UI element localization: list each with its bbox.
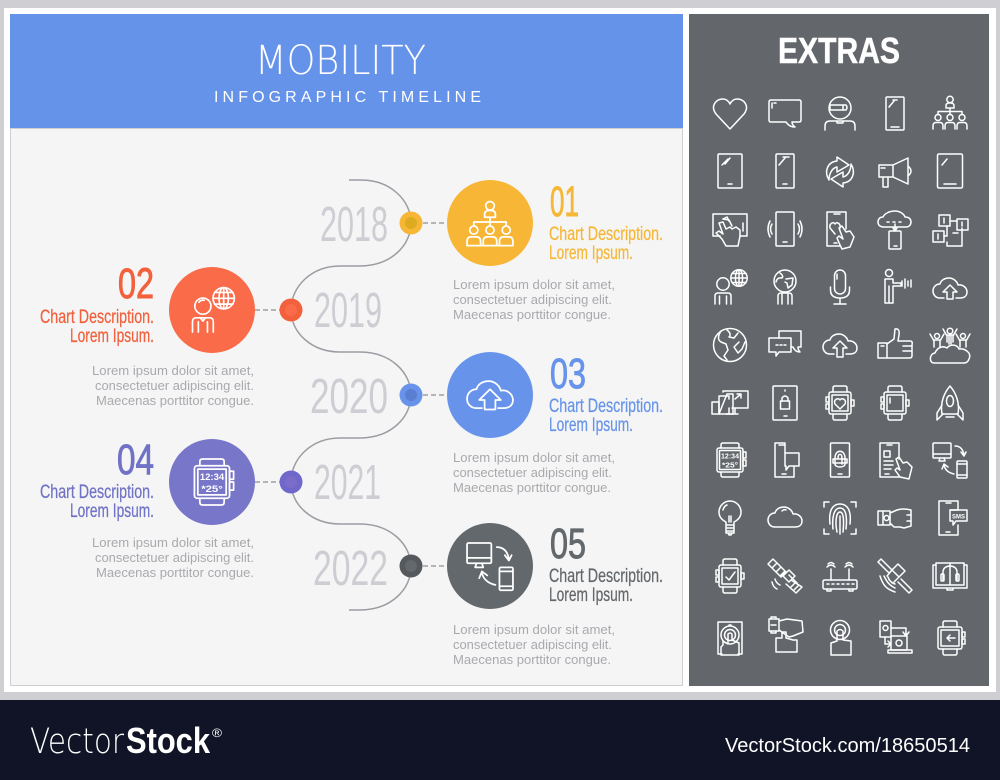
dot: 2019 (280, 298, 302, 322)
icon: light bulb (719, 501, 741, 535)
body text: Lorem ipsum dolor sit amet, (92, 363, 254, 378)
icon: smart watch: *25° (201, 484, 223, 495)
body text (453, 450, 615, 495)
body text (92, 535, 254, 580)
icon: megaphone (879, 158, 911, 187)
icon: watch (881, 386, 909, 420)
icon: phone with notifications (933, 215, 968, 246)
icon: cloud upload (933, 278, 967, 299)
body text: Lorem ipsum dolor sit amet, (453, 622, 615, 637)
chart description (549, 224, 663, 264)
chart description: Lorem Ipsum. (70, 501, 154, 522)
icon: hierarchy (933, 96, 967, 129)
number 01: 01 (550, 178, 579, 226)
icon: phone (776, 154, 794, 188)
connector dashes (255, 223, 447, 566)
subtitle: INFOGRAPHIC TIMELINE (214, 89, 481, 106)
chart description (549, 396, 663, 436)
icon: microphone (830, 270, 850, 304)
image id: VectorStock.com/18650514 (725, 735, 970, 757)
footer: VectorStock bar (30, 720, 970, 762)
year: 2019: 2019 (314, 284, 382, 338)
chart description: Chart Description. (549, 566, 663, 587)
icon: watch with time (717, 443, 746, 477)
icon: tablet large (938, 154, 962, 188)
icon: smart watch (194, 459, 234, 505)
body text: Maecenas porttitor congue. (96, 393, 254, 408)
body text: Maecenas porttitor congue. (453, 480, 611, 495)
step 02 (40, 260, 255, 408)
icon: rocket (937, 386, 963, 420)
icon: person with headset (825, 97, 855, 130)
icon: phone with fingerprint (830, 443, 850, 477)
icon: hierarchy (467, 201, 513, 246)
extras heading: EXTRAS (778, 30, 900, 71)
icon: globe on person (774, 270, 796, 304)
body text: Maecenas porttitor congue. (453, 652, 611, 667)
body text: consectetuer adipiscing elit. (95, 378, 254, 393)
icon: tablet touch (718, 622, 742, 655)
dot: 2020 (400, 384, 422, 406)
panel: timeline (10, 14, 683, 686)
dot: 2021 (280, 470, 302, 494)
icon: person and globe (192, 288, 234, 332)
icon: watch with time: 12:34 (721, 454, 739, 460)
body text: consectetuer adipiscing elit. (453, 465, 612, 480)
step 04 (40, 436, 255, 580)
icon: hand on tablet (713, 214, 747, 246)
icon: wrist watch (878, 509, 911, 528)
panel: extras (689, 14, 989, 686)
icon: cloud (768, 507, 802, 527)
dot: 2018 (400, 212, 422, 234)
number 04: 04 (117, 436, 154, 484)
icon: speech bubble (769, 100, 801, 127)
icon: cloud upload (823, 334, 857, 357)
icon: fingerprint scan (824, 502, 856, 534)
chart description (40, 307, 154, 347)
body text: Maecenas porttitor congue. (453, 307, 611, 322)
icon: refresh arrows (827, 157, 853, 187)
icon: satellite dish (878, 559, 912, 593)
icon: watch with check (716, 559, 744, 593)
title: MOBILITY (255, 38, 426, 84)
icon: people on cloud (930, 328, 970, 363)
year: 2022: 2022 (313, 542, 388, 596)
year: 2020: 2020 (310, 370, 388, 424)
year: 2021: 2021 (314, 456, 381, 510)
chart description: Chart Description. (549, 396, 663, 417)
VectorStock logo: Stock (126, 720, 211, 761)
chart description (549, 566, 663, 606)
chart description: Lorem Ipsum. (70, 326, 154, 347)
step 05 (447, 520, 663, 667)
chart description: Chart Description. (40, 307, 154, 328)
step 01 (447, 178, 663, 322)
icon: phone heart touch (827, 212, 854, 249)
icon: phone document touch (880, 443, 912, 479)
icon: heart (714, 99, 746, 129)
icon: monitor and phone sync (467, 543, 513, 590)
icon: watch with heart (826, 386, 854, 420)
body text (453, 622, 615, 667)
icon: devices (712, 391, 748, 414)
icon: watch with arrow (938, 621, 965, 655)
icon: tablet (718, 154, 742, 188)
chart description: Chart Description. (549, 224, 663, 245)
number 05: 05 (550, 520, 586, 568)
icon: phone with SMS (939, 501, 967, 535)
number 03: 03 (550, 350, 586, 398)
VectorStock logo: Vector (30, 722, 125, 762)
body text: consectetuer adipiscing elit. (453, 292, 612, 307)
body text: consectetuer adipiscing elit. (95, 550, 254, 565)
icon: phone with message (775, 443, 799, 477)
icon: phone with SMS: SMS (952, 514, 966, 520)
icon: vibrating phone (768, 212, 802, 246)
header banner (10, 14, 683, 128)
step 03 (447, 350, 663, 495)
year: 2018: 2018 (320, 198, 388, 252)
chart description: Chart Description. (40, 482, 154, 503)
body text: Lorem ipsum dolor sit amet, (453, 450, 615, 465)
chart description: Lorem Ipsum. (549, 243, 633, 264)
icon: cloud upload (467, 381, 513, 410)
icon: smart watch: 12:34 (200, 472, 225, 483)
icon: thumbs up (878, 329, 912, 358)
VectorStock logo: ® (212, 726, 222, 740)
icon: person and globe (715, 270, 747, 304)
icon: hand with watch touch (769, 617, 803, 652)
icon: finger touch (830, 620, 851, 655)
chart description (40, 482, 154, 522)
body text: Maecenas porttitor congue. (96, 565, 254, 580)
icon: watch with time: *25° (722, 462, 738, 470)
icon: satellite (768, 559, 802, 593)
body text: Lorem ipsum dolor sit amet, (453, 277, 615, 292)
icon: globe (714, 328, 746, 362)
timeline curve (291, 180, 411, 610)
icon: phone to laptop (880, 621, 912, 653)
icon: book with headphones (933, 563, 967, 590)
dot: 2022 (400, 554, 422, 578)
chart description: Lorem Ipsum. (549, 415, 633, 436)
icon: phone (886, 97, 904, 130)
VectorStock logo (30, 720, 222, 762)
icon: person with sound (885, 270, 911, 303)
icon: double speech bubbles (769, 331, 801, 356)
body text (92, 363, 254, 408)
body text (453, 277, 615, 322)
icon: tablet with lock (773, 386, 797, 420)
icon: monitor and phone sync (933, 443, 967, 478)
body text: Lorem ipsum dolor sit amet, (92, 535, 254, 550)
body text: consectetuer adipiscing elit. (453, 637, 612, 652)
icon: wifi router (823, 562, 857, 591)
chart description: Lorem Ipsum. (549, 585, 633, 606)
icon: cloud to phone (878, 211, 911, 249)
number 02: 02 (118, 260, 154, 308)
